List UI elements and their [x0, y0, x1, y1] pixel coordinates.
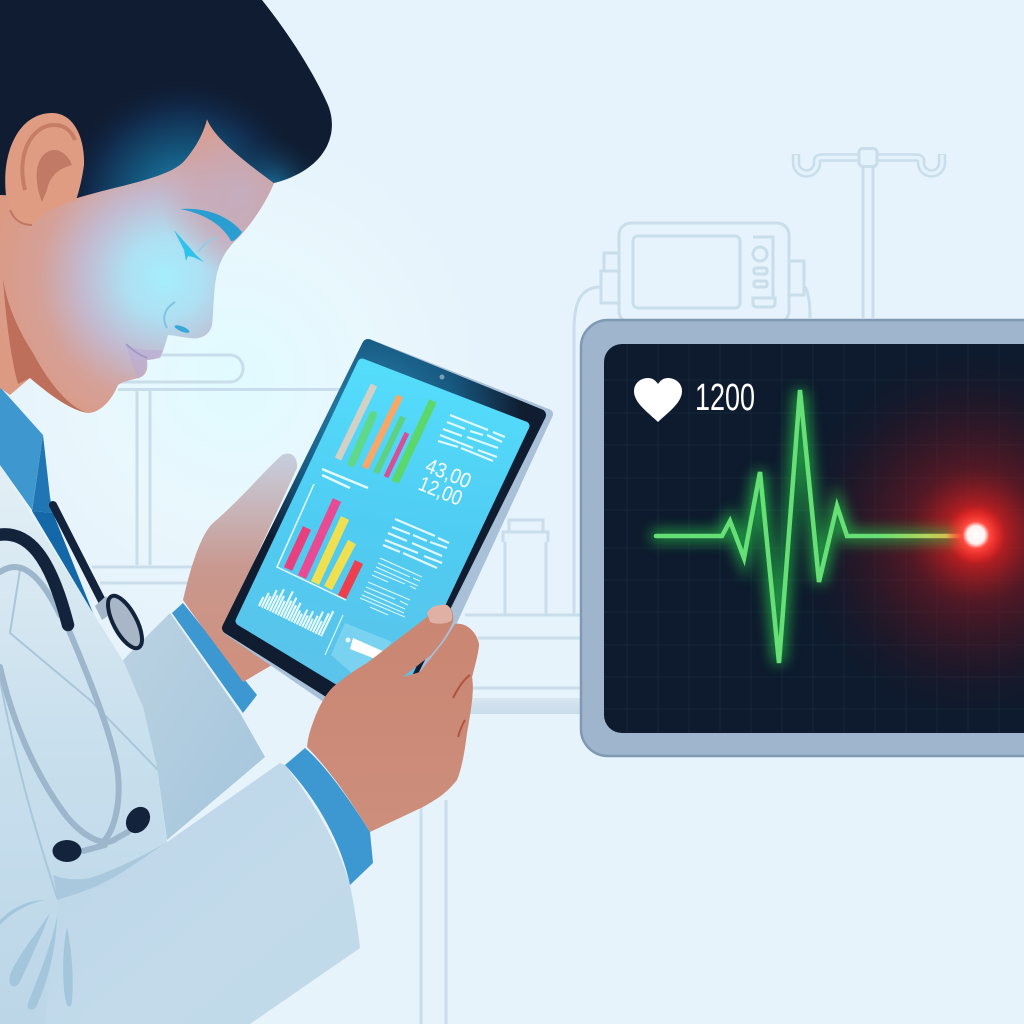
- neck and face: [0, 0, 332, 413]
- hair: [0, 0, 332, 198]
- tie: [32, 435, 93, 613]
- panel: heart monitor: [581, 320, 1024, 756]
- coat fabric folds: [0, 900, 73, 1010]
- text lines: middle block: [383, 519, 449, 568]
- shirt collar: [0, 387, 43, 510]
- monitor frame: [581, 320, 1024, 756]
- tablet numbers: 12,00: [415, 472, 465, 510]
- back sleeve: [123, 613, 265, 840]
- table legs: [421, 800, 446, 1024]
- back hand: [183, 453, 297, 682]
- forehead tint: [0, 119, 274, 300]
- panel: doctor: [0, 0, 548, 1024]
- icon: IV pole: [796, 148, 942, 318]
- camera: [440, 374, 444, 380]
- front hand: [307, 605, 479, 832]
- jaw shadow: [3, 278, 88, 413]
- eyebrow: [180, 209, 242, 241]
- alert dot: [946, 505, 1006, 565]
- bed rail: [92, 355, 345, 583]
- text lines: lower blocks: [360, 558, 422, 617]
- heart rate value: 1200: [695, 377, 755, 419]
- lips: [126, 344, 163, 379]
- bar chart: top: [322, 385, 433, 488]
- tablet numbers: [415, 454, 474, 510]
- tablet rim: [228, 344, 548, 745]
- monitor screen: [604, 344, 1024, 733]
- neck skin: [0, 270, 12, 392]
- icon: infusion pump: [574, 223, 810, 615]
- eye: [174, 230, 217, 262]
- finger creases: [453, 675, 470, 737]
- waveform chart: [259, 581, 333, 636]
- fingers behind tablet: [440, 624, 479, 740]
- panel: tablet: [228, 344, 548, 745]
- widget card: [325, 615, 392, 682]
- bar chart: bottom: [277, 484, 359, 600]
- nose: [164, 302, 190, 334]
- coat body: [0, 465, 250, 1024]
- thumbnail: [427, 605, 452, 624]
- text lines: upper block: [438, 415, 505, 461]
- coat pocket shade: [53, 842, 167, 900]
- tablet bezel: [228, 345, 540, 727]
- table band: [468, 698, 583, 714]
- back cuff: [172, 603, 257, 713]
- icon: heart: [634, 378, 682, 422]
- tablet screen: [240, 363, 525, 712]
- stethoscope: [0, 505, 155, 862]
- tablet numbers: 43,00: [422, 454, 474, 493]
- face: [0, 119, 274, 413]
- ECG line: [656, 390, 963, 663]
- coat seams: [0, 570, 158, 900]
- front sleeve: [45, 763, 360, 1024]
- background: hospital line art: [92, 148, 942, 1024]
- medicine bottle and shelves: [465, 520, 580, 688]
- front cuff: [285, 748, 373, 885]
- ear: [5, 113, 84, 225]
